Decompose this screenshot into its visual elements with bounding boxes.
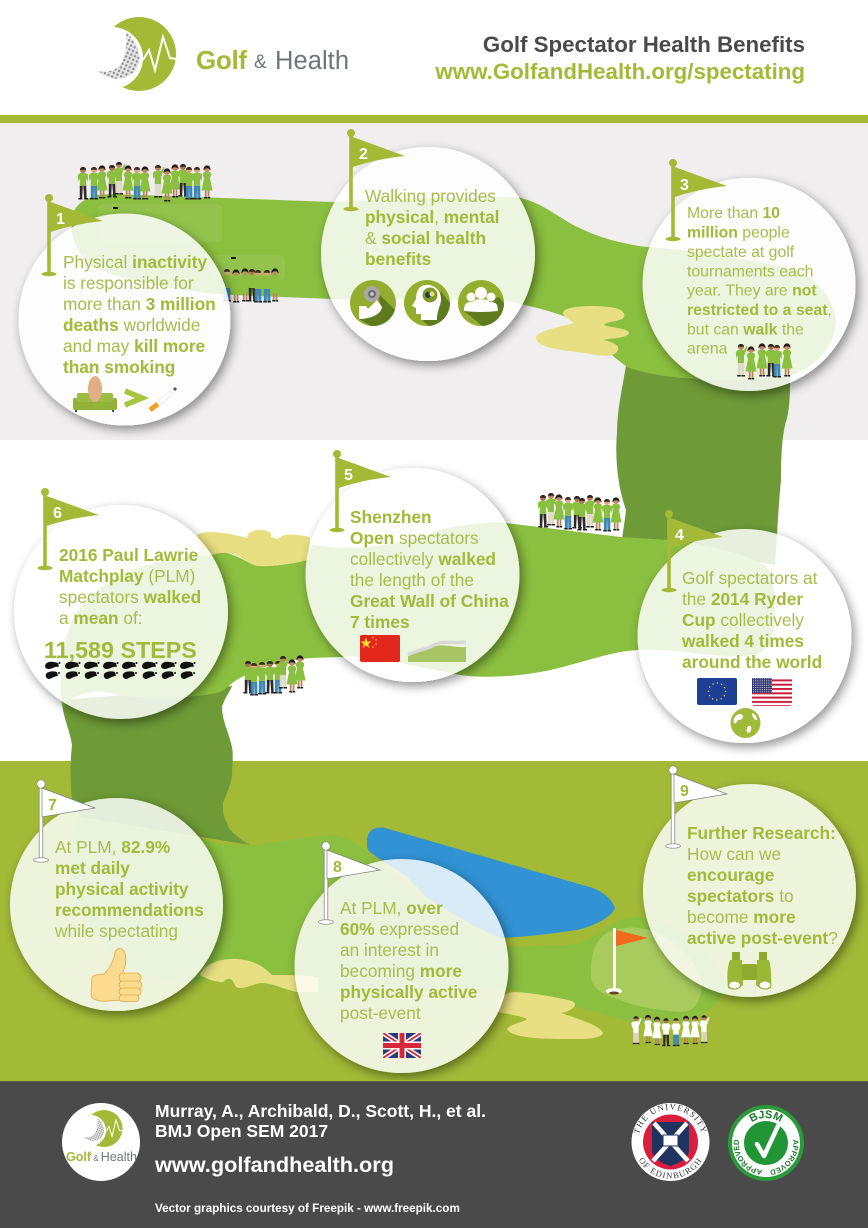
- text 4: Golf spectators at: [682, 568, 818, 588]
- text 2: & social health: [365, 228, 486, 248]
- flag 2: 2: [359, 146, 368, 163]
- icon: social group: [458, 280, 504, 326]
- text 9: become more: [687, 907, 796, 927]
- text 8: becoming more: [340, 961, 462, 981]
- icon: China flag: [360, 635, 400, 662]
- text 8: At PLM, over: [340, 898, 443, 918]
- icon: physical arm: [350, 280, 396, 326]
- text 1: more than 3 million: [63, 294, 216, 314]
- icon: USA flag: [752, 678, 792, 706]
- green header rule: [0, 115, 868, 123]
- logo: Golf and Health: [81, 17, 349, 91]
- text 9: encourage: [687, 865, 775, 885]
- icon: EU flag: [697, 678, 737, 705]
- text 3: More than 10: [687, 205, 780, 222]
- panel 1: physical inactivity: [18, 194, 230, 426]
- panel 9: further research: [643, 766, 856, 997]
- title: Golf Spectator Health Benefits: [483, 32, 805, 57]
- flag 1: 1: [56, 211, 65, 228]
- text 6: a mean of:: [59, 608, 143, 628]
- panel 2: walking benefits: [321, 129, 535, 361]
- steps number: 11,589 STEPS: [44, 637, 197, 663]
- icon: UK flag: [383, 1033, 421, 1058]
- text 1: and may kill more: [63, 336, 205, 356]
- text 9: spectators to: [687, 886, 794, 906]
- text 9: active post-event?: [687, 928, 838, 948]
- icon: thumbs up: [91, 949, 142, 1002]
- text 1: Physical inactivity: [63, 252, 207, 272]
- text 1: is responsible for: [63, 273, 194, 293]
- text 5: 7 times: [350, 612, 410, 632]
- footer logo: Golf & Health: [66, 1150, 137, 1164]
- seal: University of Edinburgh: OF EDINBURGH: [640, 1158, 702, 1178]
- flag 2: [344, 129, 405, 211]
- text 9: How can we: [687, 844, 781, 864]
- text 3: restricted to a seat,: [687, 302, 832, 319]
- logo: Golf and Health: &: [254, 52, 267, 73]
- crowd below middle fairway: [243, 655, 306, 696]
- text 6: spectators walked: [59, 587, 201, 607]
- fairway: tee boxes: [98, 204, 285, 280]
- seal: BJSM approved: BJSM: [748, 1110, 783, 1122]
- panel 3: 10 million spectators: [642, 159, 856, 391]
- grey band: [0, 123, 868, 440]
- flag 5: 5: [344, 467, 353, 484]
- panel 5: Shenzhen Open: [306, 450, 520, 682]
- bunkers: [197, 306, 629, 1039]
- text 3: but can walk the: [687, 321, 804, 338]
- icon: globe: [730, 708, 760, 738]
- hole flag: [606, 928, 648, 994]
- crowd on top fairway: [78, 162, 212, 202]
- crowd above middle fairway: [538, 493, 622, 532]
- citation: Murray, A., Archibald, D., Scott, H., et al.: [155, 1101, 486, 1121]
- fairway: bottom: [71, 817, 725, 1023]
- flag 6: 6: [53, 505, 62, 522]
- text 1: than smoking: [63, 357, 175, 377]
- flag 3: [666, 159, 727, 241]
- text 7: while spectating: [54, 921, 178, 941]
- putting green: [591, 928, 702, 1012]
- header background: [0, 0, 868, 115]
- website: www.golfandhealth.org: [154, 1152, 394, 1177]
- flag 8: [318, 842, 380, 924]
- text 2: benefits: [365, 249, 431, 269]
- text 1: deaths worldwide: [63, 315, 200, 335]
- flag 8: 8: [333, 859, 342, 876]
- icon: mental head: [404, 280, 450, 326]
- seal: University of Edinburgh: THE UNIVERSITY: [634, 1104, 707, 1134]
- text 3: arena: [687, 341, 728, 358]
- panel 4: Ryder Cup: [638, 510, 852, 743]
- citation: BMJ Open SEM 2017: [155, 1121, 328, 1141]
- text 4: around the world: [682, 652, 822, 672]
- logo: Golf and Health: Health: [275, 47, 349, 75]
- footer logo: [62, 1103, 140, 1181]
- flag 7: 7: [48, 797, 57, 814]
- text 4: walked 4 times: [681, 631, 804, 651]
- fairway: dark upper section: [616, 360, 790, 565]
- fairway: dark lower section: [62, 686, 250, 845]
- panel 6: Paul Lawrie Matchplay: [14, 488, 228, 719]
- text 6: Matchplay (PLM): [59, 566, 195, 586]
- panel 8: interest in activity: [294, 842, 508, 1073]
- crowd beside panel 1: [222, 268, 280, 302]
- crowd in panel 3: [736, 343, 792, 380]
- black dashes on tee: [113, 207, 236, 259]
- text 8: 60% expressed: [340, 919, 459, 939]
- icon: binoculars: [727, 952, 771, 989]
- text 4: the 2014 Ryder: [682, 589, 803, 609]
- attribution: Vector graphics courtesy of Freepik - www.freepik.com: [155, 1202, 460, 1215]
- olive band: [0, 761, 868, 1081]
- text 9: Further Research:: [687, 823, 836, 843]
- text 3: spectate at golf: [687, 244, 795, 261]
- crowd near green: [632, 1015, 710, 1046]
- text 5: Open spectators: [350, 528, 479, 548]
- panel 7: daily recommendations: [10, 780, 223, 1011]
- text 2: Walking provides: [365, 186, 496, 206]
- text 5: Great Wall of China: [350, 591, 509, 611]
- icon: footprints: [45, 662, 196, 679]
- text 6: 2016 Paul Lawrie: [59, 545, 199, 565]
- text 4: Cup collectively: [682, 610, 804, 630]
- seal: BJSM approved: [728, 1105, 804, 1181]
- seal: BJSM approved: APPROVED: [734, 1140, 762, 1175]
- flag 6: [38, 488, 99, 570]
- flag 9: 9: [680, 783, 689, 800]
- text 5: the length of the: [350, 570, 474, 590]
- text 3: million people: [687, 224, 790, 242]
- icon: sofa greater than cigarette: [73, 376, 176, 412]
- title: www.GolfandHealth.org/spectating: [434, 59, 805, 84]
- footer: [0, 1080, 868, 1228]
- title: [434, 32, 805, 84]
- text 5: collectively walked: [350, 549, 496, 569]
- fairway: middle: [61, 523, 775, 706]
- seal: BJSM approved: APPROVED: [770, 1140, 798, 1175]
- text 5: Shenzhen: [350, 507, 432, 527]
- flag 4: [662, 510, 723, 592]
- text 3: year. They are not: [687, 283, 817, 300]
- text 7: recommendations: [55, 900, 204, 920]
- text 2: physical, mental: [365, 207, 500, 227]
- water hazard: [367, 828, 615, 938]
- flag 4: 4: [675, 527, 684, 544]
- flag 1: [42, 194, 103, 276]
- icon: Great Wall: [408, 642, 466, 662]
- text 3: tournaments each: [687, 263, 813, 280]
- seal: University of Edinburgh: [632, 1103, 710, 1181]
- text 7: physical activity: [55, 879, 189, 899]
- flag 9: [666, 766, 727, 848]
- fairway: top: [71, 194, 836, 380]
- text 8: post-event: [340, 1003, 421, 1023]
- text 7: At PLM, 82.9%: [55, 837, 170, 857]
- logo: Golf and Health: Golf: [196, 45, 247, 75]
- text 8: physically active: [340, 982, 478, 1002]
- flag 5: [330, 450, 391, 532]
- text 8: an interest in: [340, 940, 439, 960]
- text 7: met daily: [55, 858, 130, 878]
- flag 7: [34, 780, 95, 862]
- flag 3: 3: [680, 177, 689, 194]
